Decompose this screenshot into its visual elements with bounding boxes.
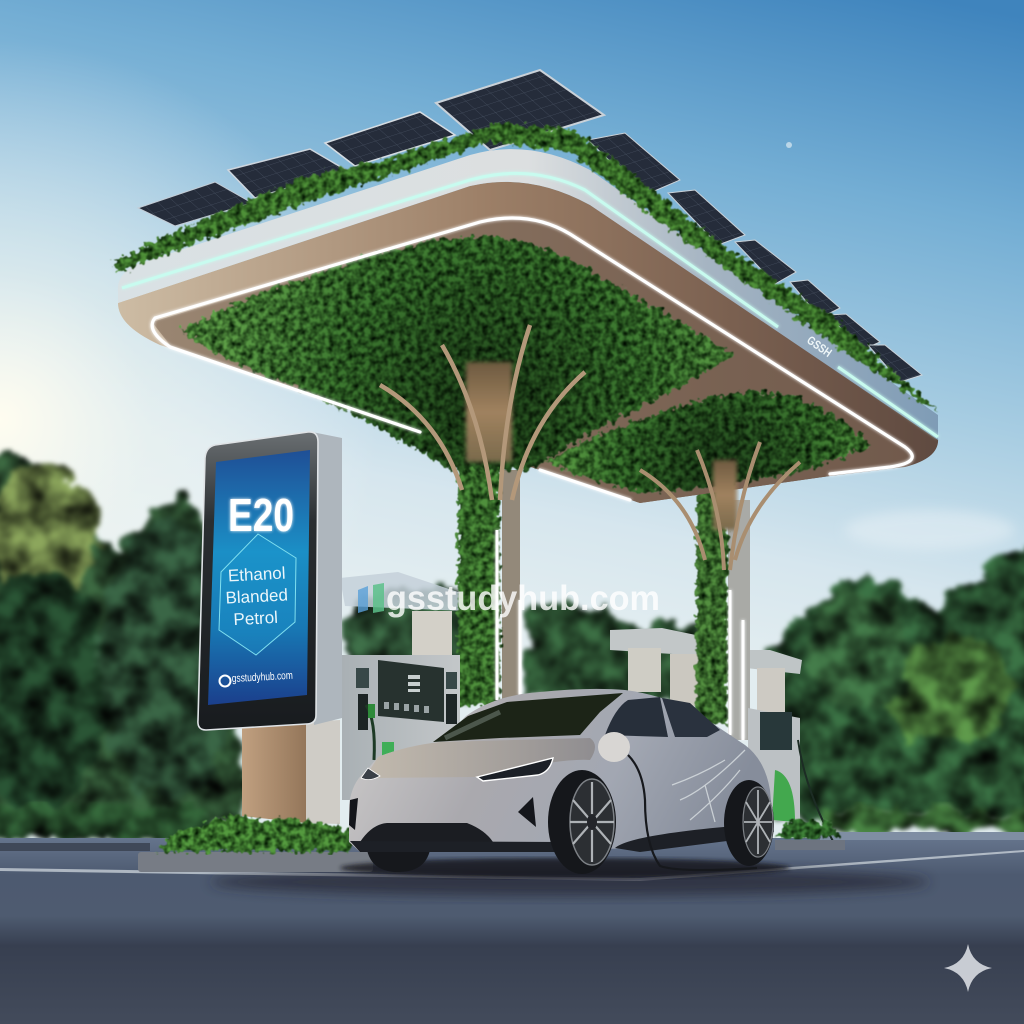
right column pair: [610, 628, 720, 706]
tree column 2: [696, 490, 750, 740]
sign text: Petrol: [233, 608, 278, 629]
wing mirror charger: [598, 732, 630, 762]
foliage under canopy 1: [180, 236, 735, 470]
canopy: [112, 70, 940, 570]
road surface: [0, 832, 1024, 1024]
planter with shrubs: [138, 815, 845, 872]
sign screen: [208, 450, 310, 705]
front far wheel: [367, 850, 430, 872]
sign text: [225, 564, 288, 629]
ribs over foliage: [380, 325, 585, 500]
background trees: right: [765, 545, 1024, 815]
white LED underside: [152, 218, 912, 500]
E20 heading: E20: [228, 489, 294, 541]
side vents: [349, 797, 536, 830]
sign frame: [198, 432, 318, 730]
electric car: [340, 689, 790, 878]
rear side window: [662, 698, 720, 737]
car body: [349, 689, 774, 852]
foliage on roof edge: [112, 122, 940, 412]
hood: [365, 738, 595, 778]
sign text: Ethanol: [227, 564, 286, 586]
underside and wood band: [118, 182, 938, 503]
digital sign: [198, 432, 342, 824]
sign post: [242, 720, 340, 824]
rear wheel: [724, 780, 774, 866]
solar panels: [138, 70, 922, 382]
grille: [360, 823, 493, 842]
trunk top 2: [713, 460, 737, 530]
far right column: [746, 650, 802, 714]
car shadow: [340, 858, 790, 878]
fuel pump 3: [748, 708, 835, 845]
sign side: [312, 432, 342, 725]
vine decal: [672, 750, 745, 822]
front wheel: [548, 770, 616, 874]
background trees: middle: [345, 582, 700, 700]
icon: sparkle: [944, 944, 992, 992]
watermark: gsstudyhub.com: [386, 579, 660, 618]
trunk top: [466, 362, 512, 462]
hexagon: [219, 534, 296, 655]
sign text: Blanded: [225, 585, 288, 608]
foliage under canopy 2: [545, 392, 870, 492]
front side window: [605, 697, 668, 737]
fuel pump 1: [342, 655, 460, 800]
small roof with column behind the watermark: [340, 572, 470, 671]
sign logo: [220, 670, 293, 686]
headlight: [477, 758, 553, 781]
hedge line: [0, 805, 1024, 839]
fuel station background columns: [340, 572, 802, 714]
charging cable: [628, 755, 757, 870]
sign logo: gsstudyhub.com: [232, 670, 293, 685]
cyan LED strip: [122, 173, 938, 437]
watermark logo: [358, 583, 384, 613]
front bumper bar and sill: [350, 826, 735, 852]
tree column 1: [458, 462, 520, 706]
fascia logo text: GSSH: [804, 333, 834, 360]
left headlight: [361, 768, 380, 780]
windshield: [433, 693, 623, 742]
background trees: left: [0, 457, 245, 820]
white fascia: [118, 149, 938, 440]
